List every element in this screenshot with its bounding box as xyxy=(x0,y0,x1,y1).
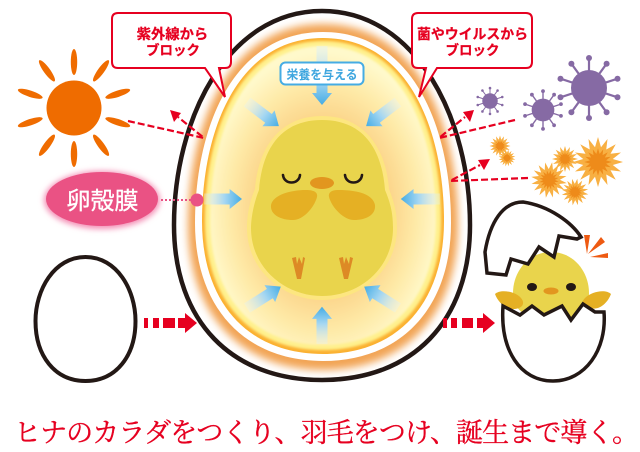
icon: sun xyxy=(17,49,131,167)
small empty egg xyxy=(36,257,136,381)
label: nutrients: 栄養を与える xyxy=(286,67,358,82)
arrow: egg to developing egg xyxy=(144,313,197,333)
icon: bacteria xyxy=(490,136,623,208)
icon: viruses xyxy=(476,55,620,131)
hatching chick xyxy=(485,202,611,381)
arrow: developing egg to hatchling xyxy=(443,313,495,333)
arrow: viruses reflected xyxy=(439,110,515,138)
feet xyxy=(292,257,353,279)
title: ヒナのカラダをつくり、羽毛をつけ、誕生まで導く。 xyxy=(14,418,639,448)
eggshell membrane glow xyxy=(188,24,458,370)
eggshell membrane label xyxy=(44,171,160,229)
label: nutrients xyxy=(280,62,364,84)
callout: bacteria and virus block xyxy=(412,13,532,97)
eyes xyxy=(527,283,576,291)
large egg: outer shell xyxy=(174,11,470,380)
hatchling wings xyxy=(495,291,611,309)
callout: UV block: ブロック xyxy=(146,42,200,58)
membrane pointer xyxy=(161,194,204,206)
callout: bacteria and virus block: 菌やウイルスから xyxy=(417,26,528,42)
eggshell membrane label: 卵殻膜 xyxy=(66,181,138,216)
hatchling beak xyxy=(544,288,558,294)
arrow: bacteria reflected xyxy=(450,159,528,181)
chick inside egg xyxy=(247,116,397,300)
beak xyxy=(310,177,334,189)
callout: UV block xyxy=(112,13,231,97)
nutrient arrows xyxy=(204,46,440,344)
upper shell xyxy=(485,202,581,275)
lower shell xyxy=(503,304,604,381)
callout: bacteria and virus block: ブロック xyxy=(446,42,500,58)
arrow: UV reflected xyxy=(128,110,204,138)
surprise marks xyxy=(584,235,608,258)
wings xyxy=(271,190,375,220)
closed eyes xyxy=(283,175,362,182)
chick head xyxy=(513,252,589,320)
callout: UV block: 紫外線から xyxy=(137,26,208,43)
yolk interior xyxy=(202,38,444,354)
